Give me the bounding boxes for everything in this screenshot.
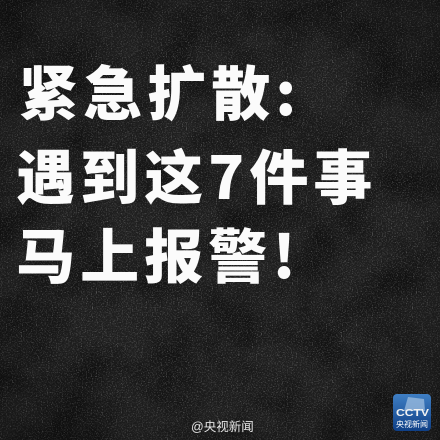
headline line 1: 紧急扩散: [19, 47, 301, 132]
logo caption: 央视新闻 [396, 419, 428, 429]
headline line 3: 马上报警! [16, 210, 301, 295]
watermark: weibo handle: @央视新闻 [191, 419, 254, 434]
logo wordmark: CCTV [396, 408, 429, 419]
logo highlight shape [404, 397, 425, 411]
icon: CCTV news logo [393, 394, 431, 431]
headline line 2: 遇到这7件事 [16, 131, 378, 216]
title: three-line headline [16, 47, 378, 295]
